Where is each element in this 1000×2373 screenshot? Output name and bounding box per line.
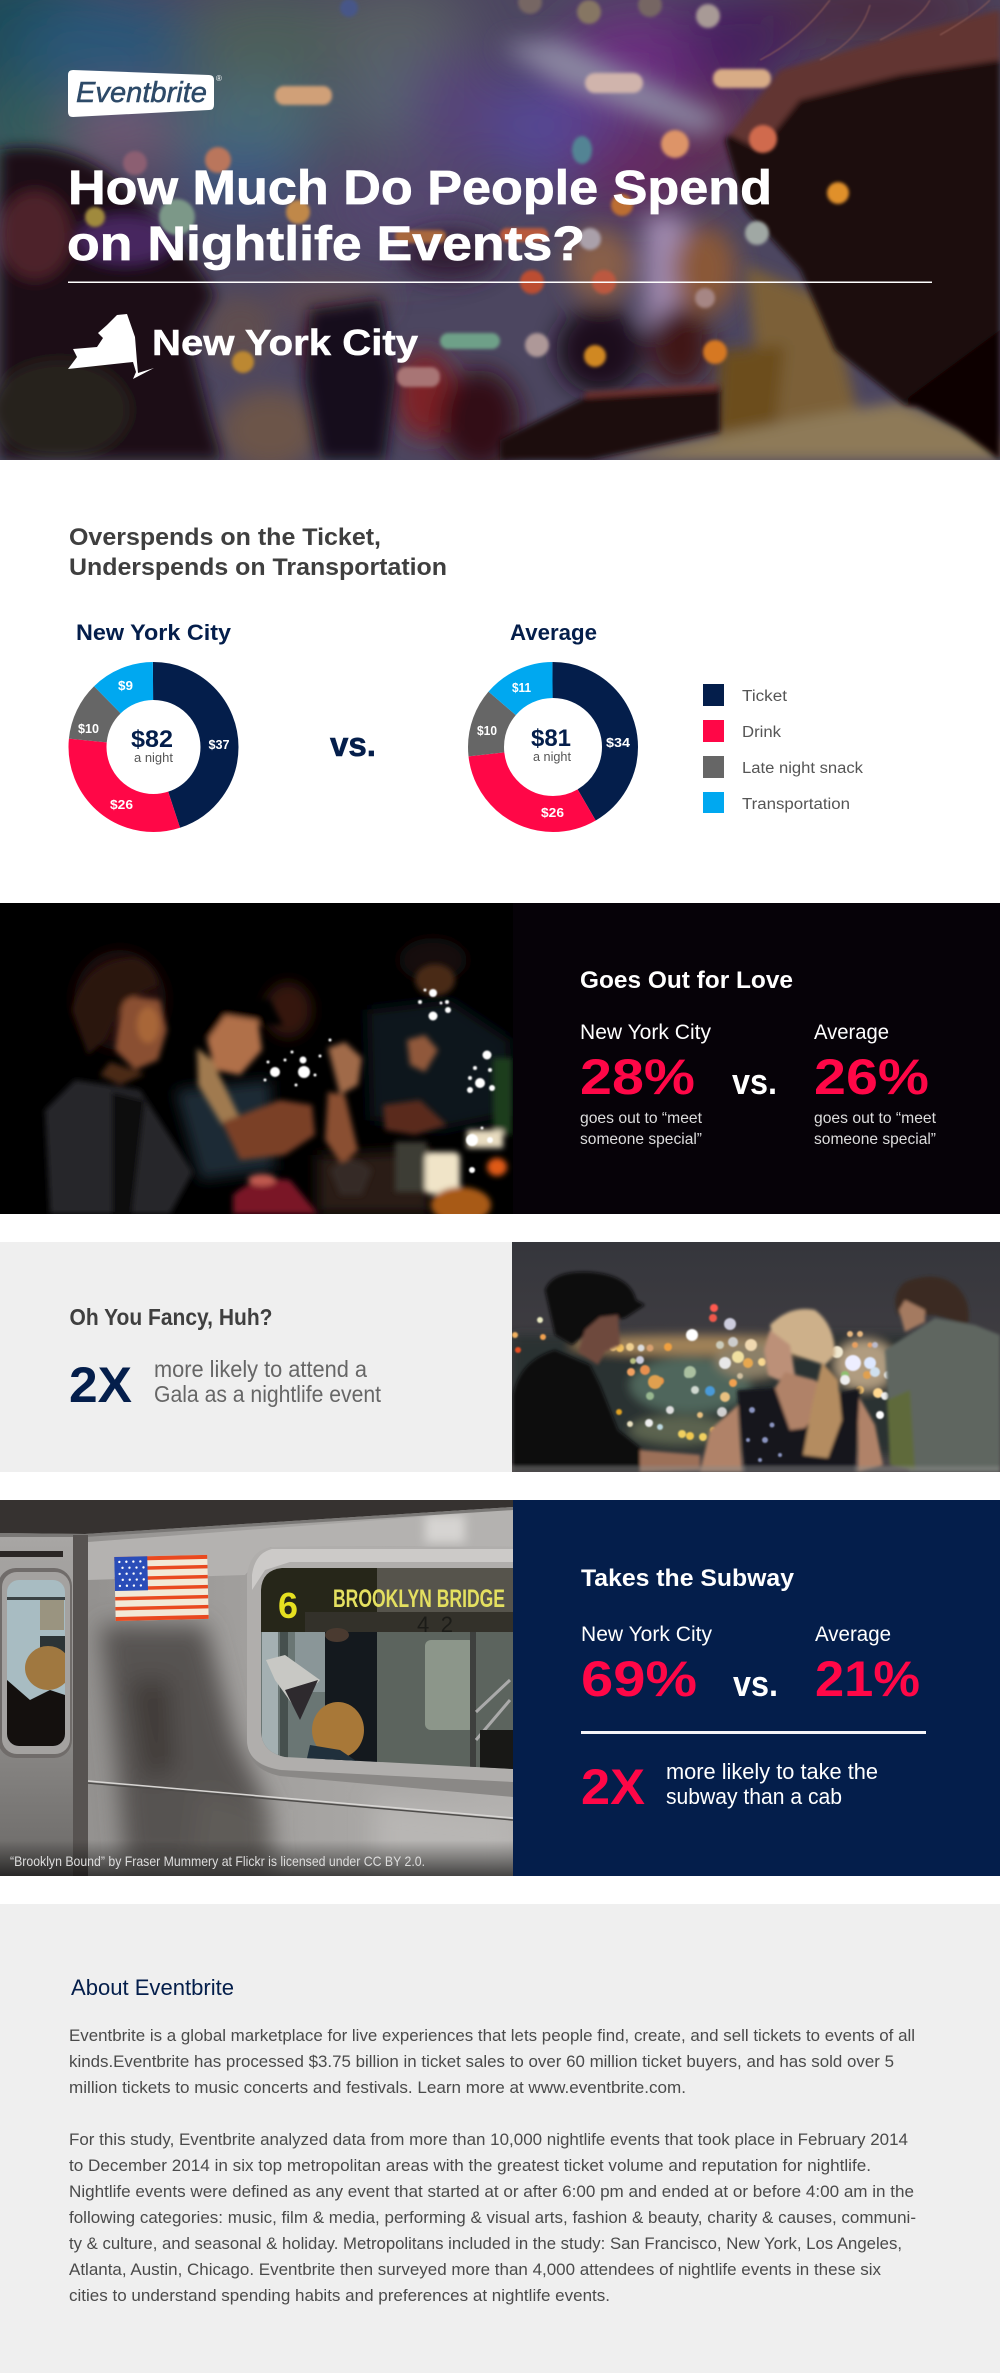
text block: study methodology: Nightlife events were defined as any event that started at or after 6:00 pm and ended at or before 4:00 am in the: [69, 2183, 914, 2201]
stat: Average 21%: 21%: [815, 1651, 920, 1707]
figure silhouette centre: [305, 300, 395, 460]
stat: New York City 28%: someone special”: [580, 1131, 702, 1148]
window frame: [247, 1547, 354, 1774]
title: How Much Do People Spend: [68, 162, 772, 215]
icon: New York state silhouette: [68, 314, 154, 379]
Eventbrite logo: ®: [216, 74, 222, 83]
panel: about Eventbrite: [0, 1904, 1000, 2373]
legend: Drink: [742, 724, 781, 741]
text block: study methodology: Atlanta, Austin, Chicago. Eventbrite then surveyed more than 4,000 attendees of nightlife events in these six: [69, 2261, 882, 2279]
Eventbrite logo: Eventbrite: [76, 77, 207, 109]
text block: about paragraph: [69, 2027, 915, 2097]
legend: [703, 684, 863, 813]
stat: Average 26%: 26%: [814, 1049, 929, 1105]
dark arm: [500, 386, 720, 460]
heading: overspends on the ticket: [69, 524, 447, 581]
neck and sleeve right: [745, 265, 860, 430]
door: [0, 1537, 75, 1876]
donut chart: Average: $34: [606, 736, 630, 750]
Eventbrite logo: [68, 70, 222, 117]
stat: New York City 28%: 28%: [580, 1049, 695, 1105]
stat: Average 26%: someone special”: [814, 1131, 936, 1148]
top dark roof band: [0, 1500, 513, 1534]
stat: New York City 69%: 69%: [581, 1651, 697, 1707]
donut chart: Average: $11: [512, 681, 531, 695]
legend: Ticket: [742, 688, 788, 705]
legend: Late night snack: [742, 760, 863, 777]
vs label: vs.: [330, 726, 376, 764]
donut chart: New York City: $26: [110, 798, 133, 812]
stat: New York City 69%: [581, 1623, 712, 1707]
text block: study methodology: ty & culture, and seasonal & holiday. Metropolitans included in the study: San Francisco, New York, Los Angeles,: [69, 2235, 902, 2253]
heading: oh you fancy: Oh You Fancy, Huh?: [70, 1304, 272, 1330]
LED destination sign: 6: [278, 1585, 298, 1626]
donut chart: New York City: New York City: [76, 620, 232, 645]
stat description: [154, 1356, 382, 1407]
vs label: vs.: [732, 1061, 777, 1102]
panel: spending comparison: [0, 460, 1000, 903]
donut chart: Average: [477, 620, 630, 820]
photo: subway car, Brooklyn Bridge 6 train: [0, 1500, 513, 1876]
heading: goes out for love: Goes Out for Love: [580, 967, 793, 994]
donut chart: Average: Average: [510, 620, 597, 645]
stat: Average 21%: [815, 1623, 920, 1707]
panel: goes out for love: [0, 903, 1000, 1223]
navy text background: [513, 1500, 1000, 1876]
heading: overspends on the ticket: Underspends on Transportation: [69, 554, 447, 581]
text block: study methodology: following categories: music, film & media, performing & visual arts, fashion & beauty, charity & causes, communi-: [69, 2209, 916, 2227]
stat description: Gala as a nightlife event: [154, 1381, 382, 1407]
donut chart: New York City: $82: [131, 726, 173, 753]
heading: about Eventbrite: About Eventbrite: [71, 1975, 234, 2000]
stat: New York City 28%: New York City: [580, 1021, 711, 1044]
stat: 2X more likely than a cab: subway than a cab: [666, 1784, 842, 1809]
heading: takes the subway: Takes the Subway: [581, 1565, 795, 1592]
photo: friends with sparklers: [0, 903, 513, 1223]
text block: study methodology: to December 2014 in six top metropolitan areas with the greatest ticket volume and reputation for nightlife.: [69, 2157, 871, 2175]
heading: overspends on the ticket: Overspends on the Ticket,: [69, 524, 381, 551]
text block: about paragraph: Eventbrite is a global marketplace for live experiences that lets people find, create, and sell tickets to events of all: [69, 2027, 915, 2045]
panel: oh you fancy, huh?: [0, 1242, 1000, 1472]
vs label: vs.: [733, 1663, 778, 1704]
stat: Average 26%: Average: [814, 1021, 889, 1044]
donut chart: Average: $10: [477, 724, 497, 738]
donut chart: New York City: $9: [118, 679, 133, 693]
title: on Nightlife Events?: [67, 218, 585, 271]
city name: New York City: [152, 322, 418, 363]
donut chart: New York City: $10: [78, 722, 99, 736]
text block: study methodology: [69, 2131, 916, 2305]
donut chart: Average: $26: [541, 806, 564, 820]
legend: Transportation: [742, 796, 850, 813]
donut chart: New York City: $37: [208, 738, 230, 752]
text block: study methodology: For this study, Eventbrite analyzed data from more than 10,000 nightlife events that took place in February 2014: [69, 2131, 908, 2149]
LED destination sign: 42: [417, 1612, 453, 1637]
right head of dark hair: [725, 30, 1000, 420]
hero banner: [0, 0, 1000, 470]
panel seam: [88, 1783, 513, 1820]
donut chart: New York City: a night: [134, 750, 173, 765]
bright band above window: [88, 1518, 418, 1580]
stat: New York City 69%: New York City: [581, 1623, 712, 1646]
text block: about paragraph: million tickets to music concerts and festivals. Learn more at www.eventbrite.com.: [69, 2079, 686, 2097]
stat: 2X more likely than a cab: [581, 1759, 878, 1815]
flag decal: [114, 1555, 209, 1621]
left hair: [0, 148, 222, 460]
photo credit: “Brooklyn Bound” by Fraser Mummery at Flickr is licensed under CC BY 2.0.: [10, 1853, 425, 1869]
stat: 2X more likely than a cab: more likely to take the: [666, 1759, 878, 1784]
stat: Average 26%: [814, 1021, 937, 1148]
donut chart: New York City: [76, 620, 232, 813]
stat: Average 26%: goes out to “meet: [814, 1110, 937, 1127]
LED destination sign: BROOKLYN BRIDGE: [333, 1585, 505, 1613]
stat description: more likely to attend a: [154, 1356, 367, 1382]
left door window: [0, 1568, 72, 1758]
stat: Average 21%: Average: [815, 1623, 891, 1646]
donut chart: Average: $81: [531, 725, 571, 752]
panel: takes the subway: [0, 1500, 1000, 1876]
stat: 2X more likely than a cab: 2X: [581, 1759, 645, 1815]
dark text background: [513, 903, 1000, 1214]
stat: 2X: 2X: [69, 1357, 132, 1413]
stat: New York City 28%: goes out to “meet: [580, 1110, 703, 1127]
title: [67, 162, 772, 271]
donut chart: Average: a night: [533, 749, 571, 764]
stat: New York City 28%: [580, 1021, 711, 1148]
text block: study methodology: cities to understand spending habits and preferences at nightlife events.: [69, 2287, 610, 2305]
LED destination sign: [279, 1589, 504, 1632]
hero photo: blurred concert crowd: [0, 0, 1000, 470]
photo: friends looking over city lights: [512, 1242, 1000, 1472]
text block: about paragraph: kinds.Eventbrite has processed $3.75 billion in ticket sales to over 60 million ticket buyers, and has sold over 5: [69, 2053, 894, 2071]
